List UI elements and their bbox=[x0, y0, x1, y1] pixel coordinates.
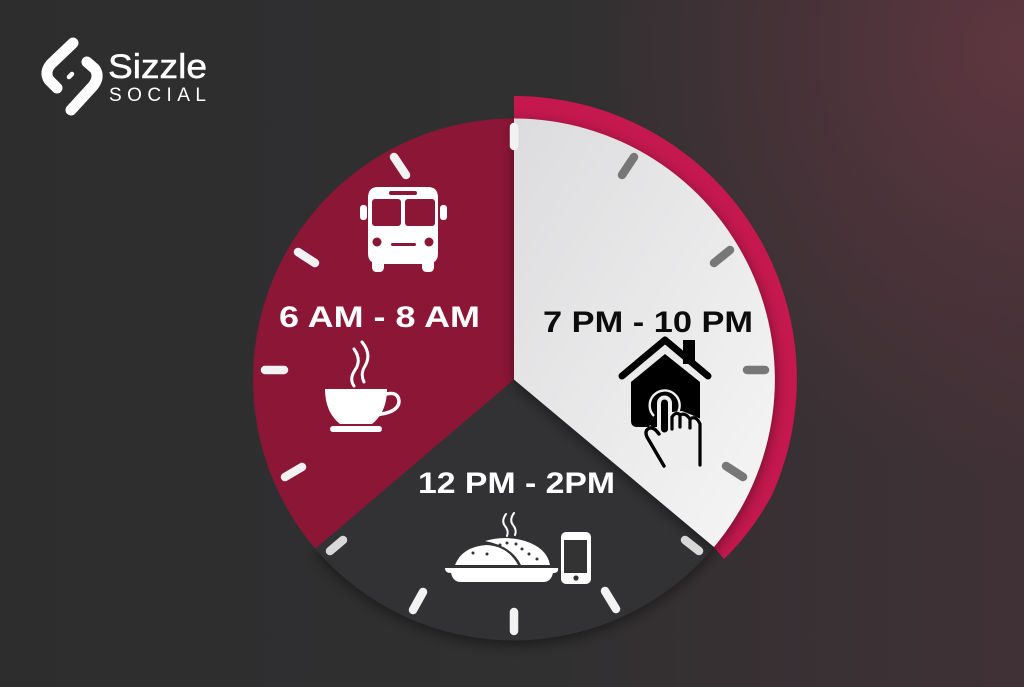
icon: coffee cup bbox=[325, 342, 399, 432]
icon: bus bbox=[360, 187, 447, 272]
logo: Sizzle Social bbox=[47, 43, 207, 110]
clock dial bbox=[253, 118, 775, 640]
label: 6 AM - 8 AM: 6 AM - 8 AM bbox=[279, 301, 480, 334]
label: 7 PM - 10 PM: 7 PM - 10 PM bbox=[543, 306, 753, 339]
logo wordmark: Sizzle bbox=[108, 48, 207, 86]
panel: white evening segment bbox=[514, 118, 775, 547]
panel: red morning segment bbox=[253, 118, 514, 549]
logo tagline: SOCIAL bbox=[109, 85, 206, 106]
logo icon bbox=[47, 43, 97, 110]
clock ticks bbox=[265, 127, 765, 631]
icon: food dish bbox=[445, 513, 558, 582]
icon: smartphone bbox=[561, 532, 591, 584]
label: 12 PM - 2PM: 12 PM - 2PM bbox=[418, 467, 615, 500]
panel: red outer ring for 7 PM - 10 PM bbox=[514, 96, 797, 559]
panel: dark lunch segment bbox=[315, 380, 714, 640]
icon: home with tapping hand bbox=[622, 340, 708, 470]
